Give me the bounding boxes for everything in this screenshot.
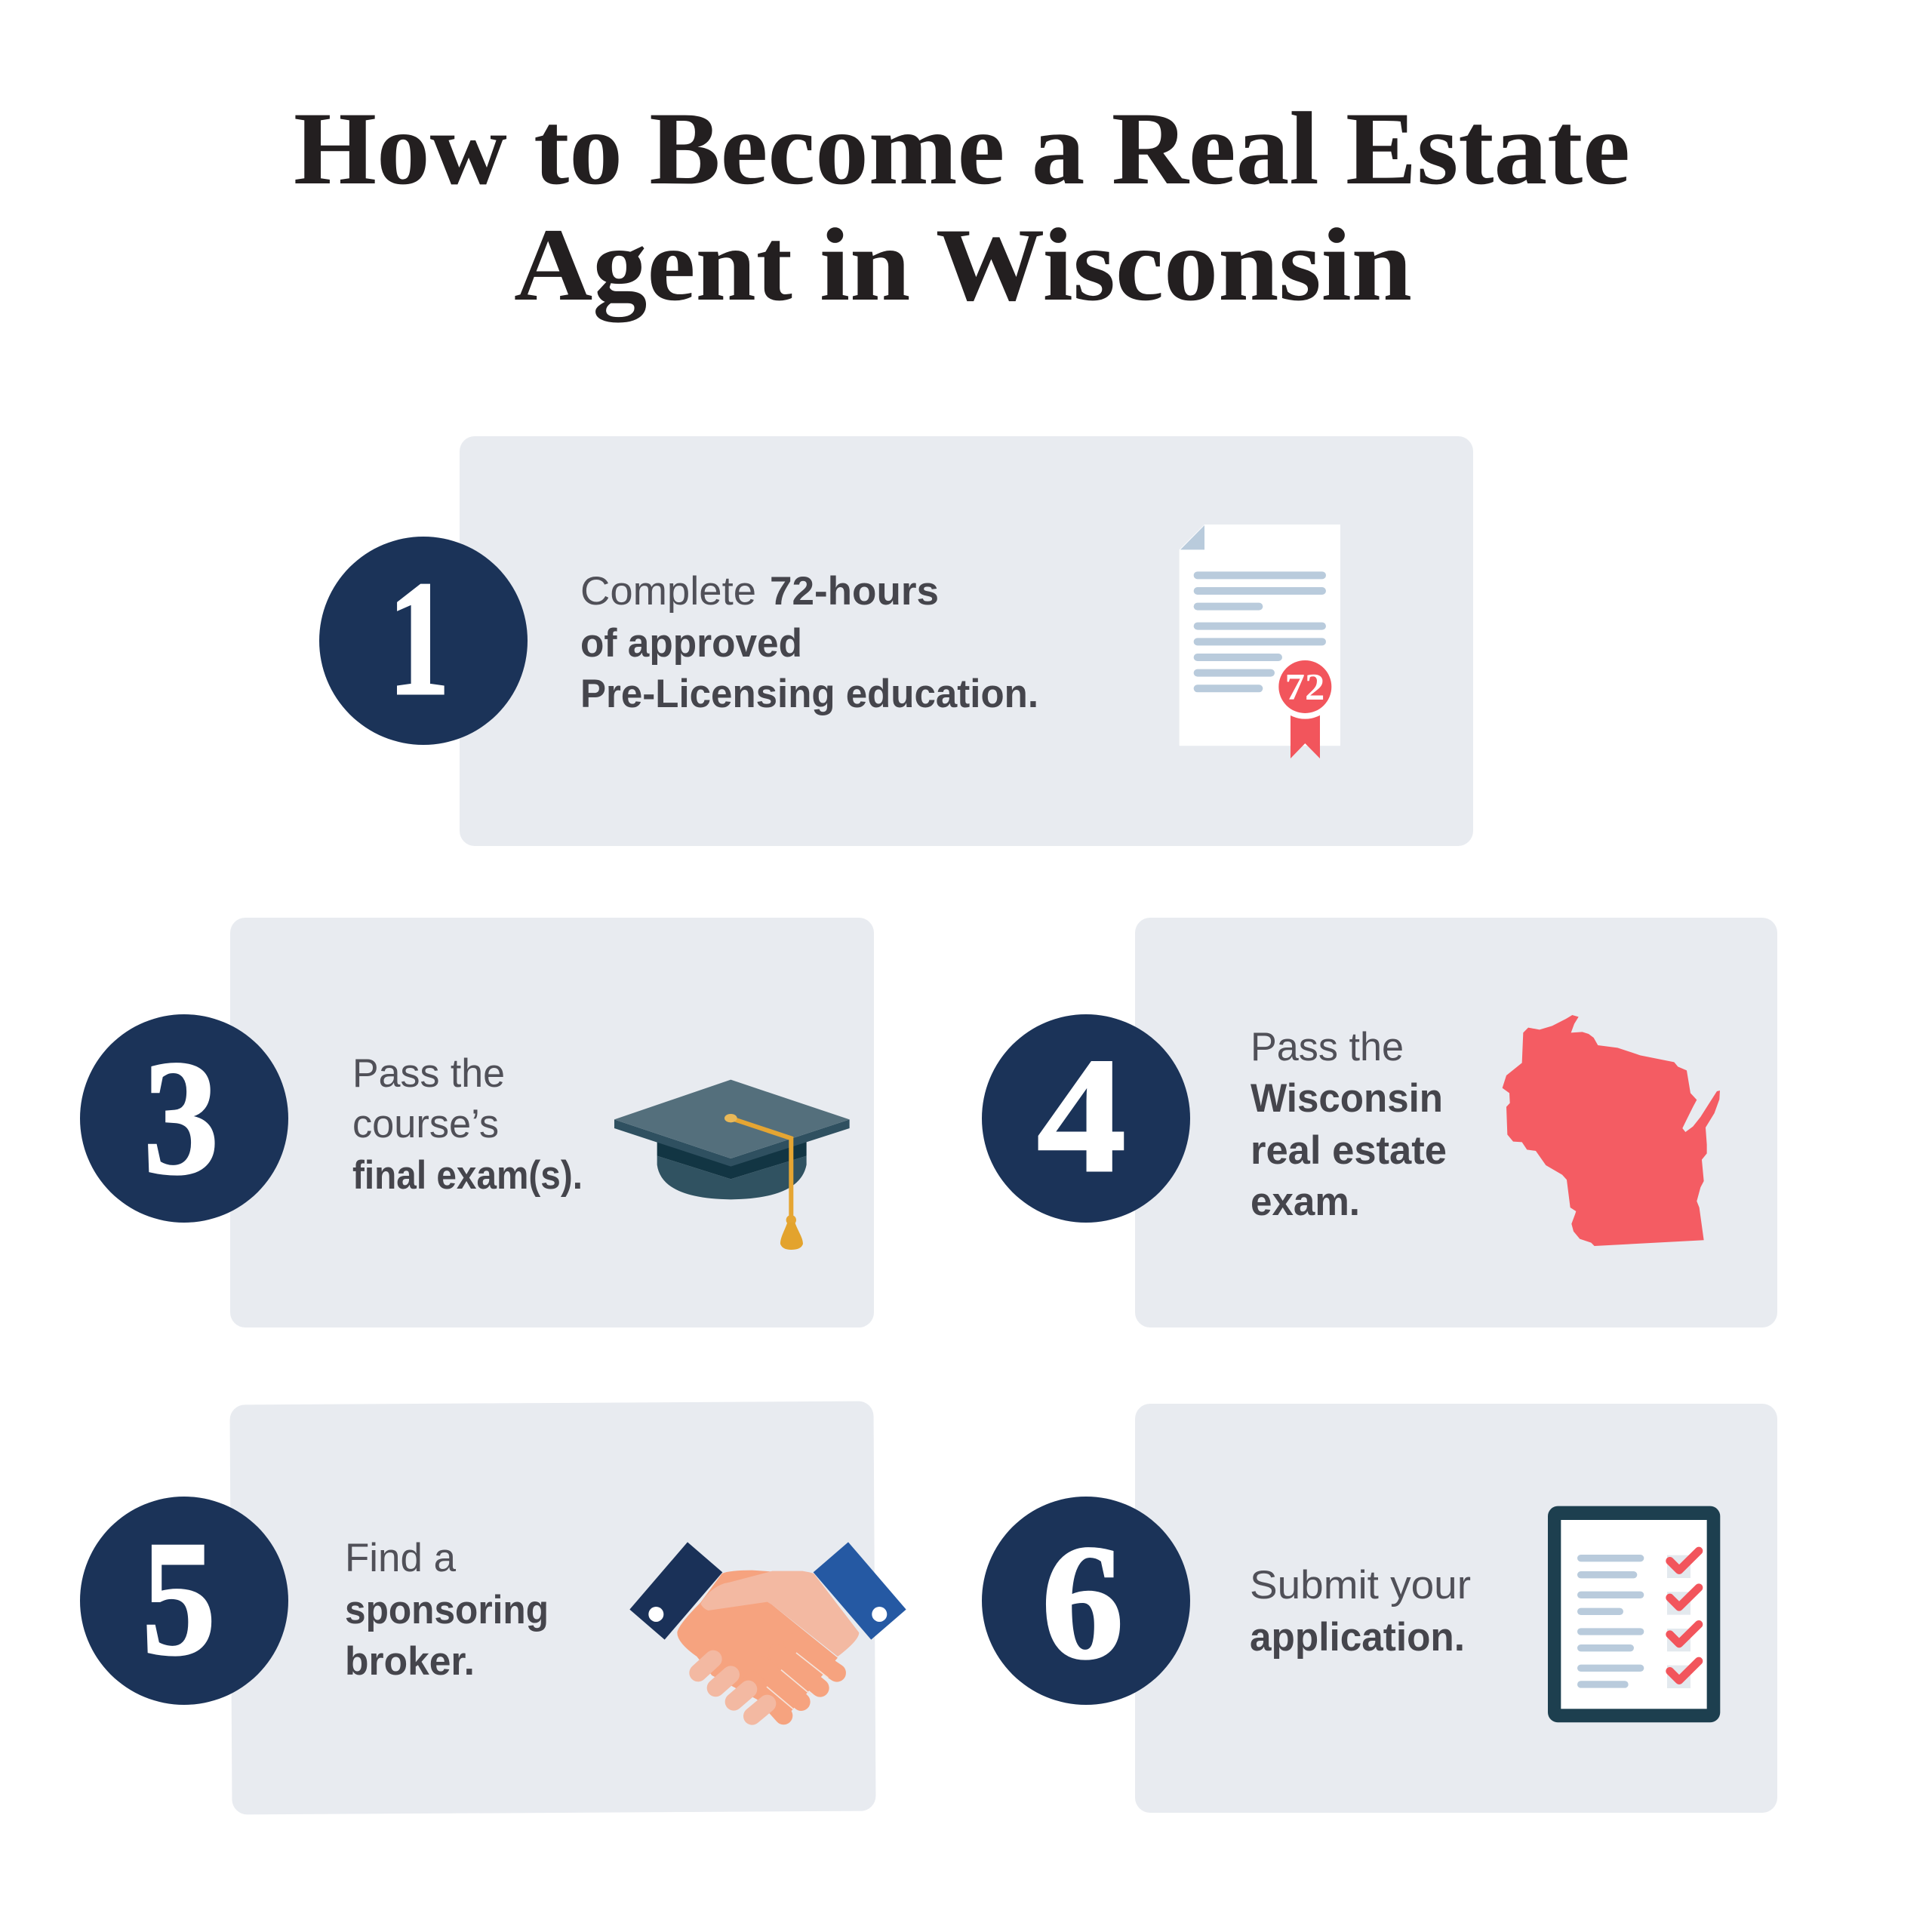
step 1 number badge bbox=[319, 537, 528, 745]
step 4 text bbox=[1251, 1025, 1447, 1224]
panel: step 1 bbox=[319, 436, 1473, 846]
icon: certificate document bbox=[1180, 525, 1340, 758]
icon: Wisconsin map bbox=[1503, 1015, 1720, 1246]
step 3 text: Pass the bbox=[352, 1051, 505, 1096]
step 5 text: Find a bbox=[345, 1536, 457, 1580]
step 1 text: Complete bbox=[580, 569, 756, 614]
title: Agent in Wisconsin bbox=[514, 207, 1412, 322]
step 5 number badge: 5 bbox=[142, 1508, 216, 1690]
step 1 text: of approved bbox=[580, 621, 802, 666]
panel: step 6 bbox=[982, 1404, 1777, 1813]
step 6 number badge bbox=[982, 1497, 1190, 1705]
step 1 text bbox=[580, 569, 1038, 716]
step 3 number badge bbox=[80, 1014, 288, 1223]
step 3 text bbox=[352, 1051, 583, 1198]
step 6 text: Submit your bbox=[1250, 1563, 1471, 1607]
step 3 text: final exam(s). bbox=[352, 1153, 583, 1198]
step 4 number badge bbox=[982, 1014, 1190, 1223]
icon: handshake bbox=[629, 1542, 906, 1716]
icon: certificate document: 72 bbox=[1285, 666, 1324, 708]
step 6 number badge: 6 bbox=[1041, 1512, 1124, 1694]
step 4 text: Wisconsin bbox=[1251, 1076, 1443, 1121]
step 5 text: broker. bbox=[345, 1639, 475, 1684]
step 4 number badge: 4 bbox=[1037, 1025, 1126, 1207]
step 4 text: real estate bbox=[1251, 1128, 1447, 1173]
step 5 text: sponsoring bbox=[345, 1588, 549, 1632]
title: How to Become a Real Estate bbox=[294, 91, 1630, 206]
step 3 number badge: 3 bbox=[143, 1027, 219, 1209]
step 5 number badge bbox=[80, 1497, 288, 1705]
step 6 text: application. bbox=[1250, 1615, 1465, 1660]
panel: step 3 bbox=[80, 918, 874, 1327]
step 4 text: exam. bbox=[1251, 1180, 1360, 1224]
step 1 number badge: 1 bbox=[388, 548, 450, 730]
step 5 text bbox=[345, 1536, 549, 1684]
step 3 text: course’s bbox=[352, 1102, 499, 1146]
step 1 text: 72-hours bbox=[770, 569, 939, 614]
step 4 text: Pass the bbox=[1251, 1025, 1404, 1069]
step 1 text: Pre-Licensing education. bbox=[580, 672, 1038, 716]
icon: checklist bbox=[1548, 1506, 1720, 1722]
panel: step 4 bbox=[982, 918, 1777, 1327]
icon: graduation cap bbox=[614, 1080, 850, 1250]
step 6 text bbox=[1250, 1563, 1471, 1660]
title bbox=[294, 91, 1630, 322]
panel: step 5 bbox=[80, 1401, 906, 1814]
